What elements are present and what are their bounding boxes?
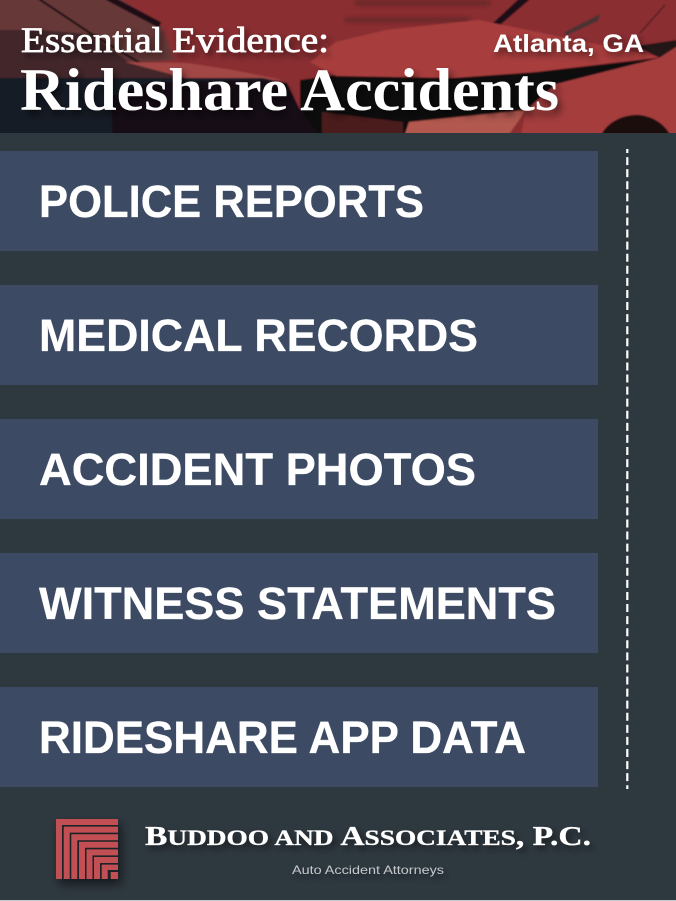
panel: medical records — [0, 285, 598, 385]
panel: accident photos — [0, 419, 598, 519]
panel: rideshare app data — [0, 687, 598, 787]
location label: Atlanta, GA — [493, 30, 644, 58]
company name: BUDDOO AND ASSOCIATES , P.C. — [145, 821, 591, 851]
bottom edge line — [0, 900, 676, 901]
header photo: crashed cars in red duotone — [0, 0, 676, 140]
dashed vertical timeline — [626, 149, 628, 789]
label: medical records: MEDICAL RECORDS — [39, 310, 478, 361]
panel: police reports — [0, 151, 598, 251]
tagline: Auto Accident Attorneys — [292, 863, 444, 877]
panel: witness statements — [0, 553, 598, 653]
label: accident photos: ACCIDENT PHOTOS — [39, 444, 476, 495]
label: witness statements: WITNESS STATEMENTS — [39, 578, 556, 629]
icon: company logo — [56, 819, 118, 879]
title line: Essential Evidence: Essential Evidence: — [21, 20, 329, 60]
label: police reports: POLICE REPORTS — [39, 176, 424, 227]
title line: Rideshare Accidents: Rideshare Accidents — [20, 57, 559, 123]
label: rideshare app data: RIDESHARE APP DATA — [39, 712, 526, 763]
